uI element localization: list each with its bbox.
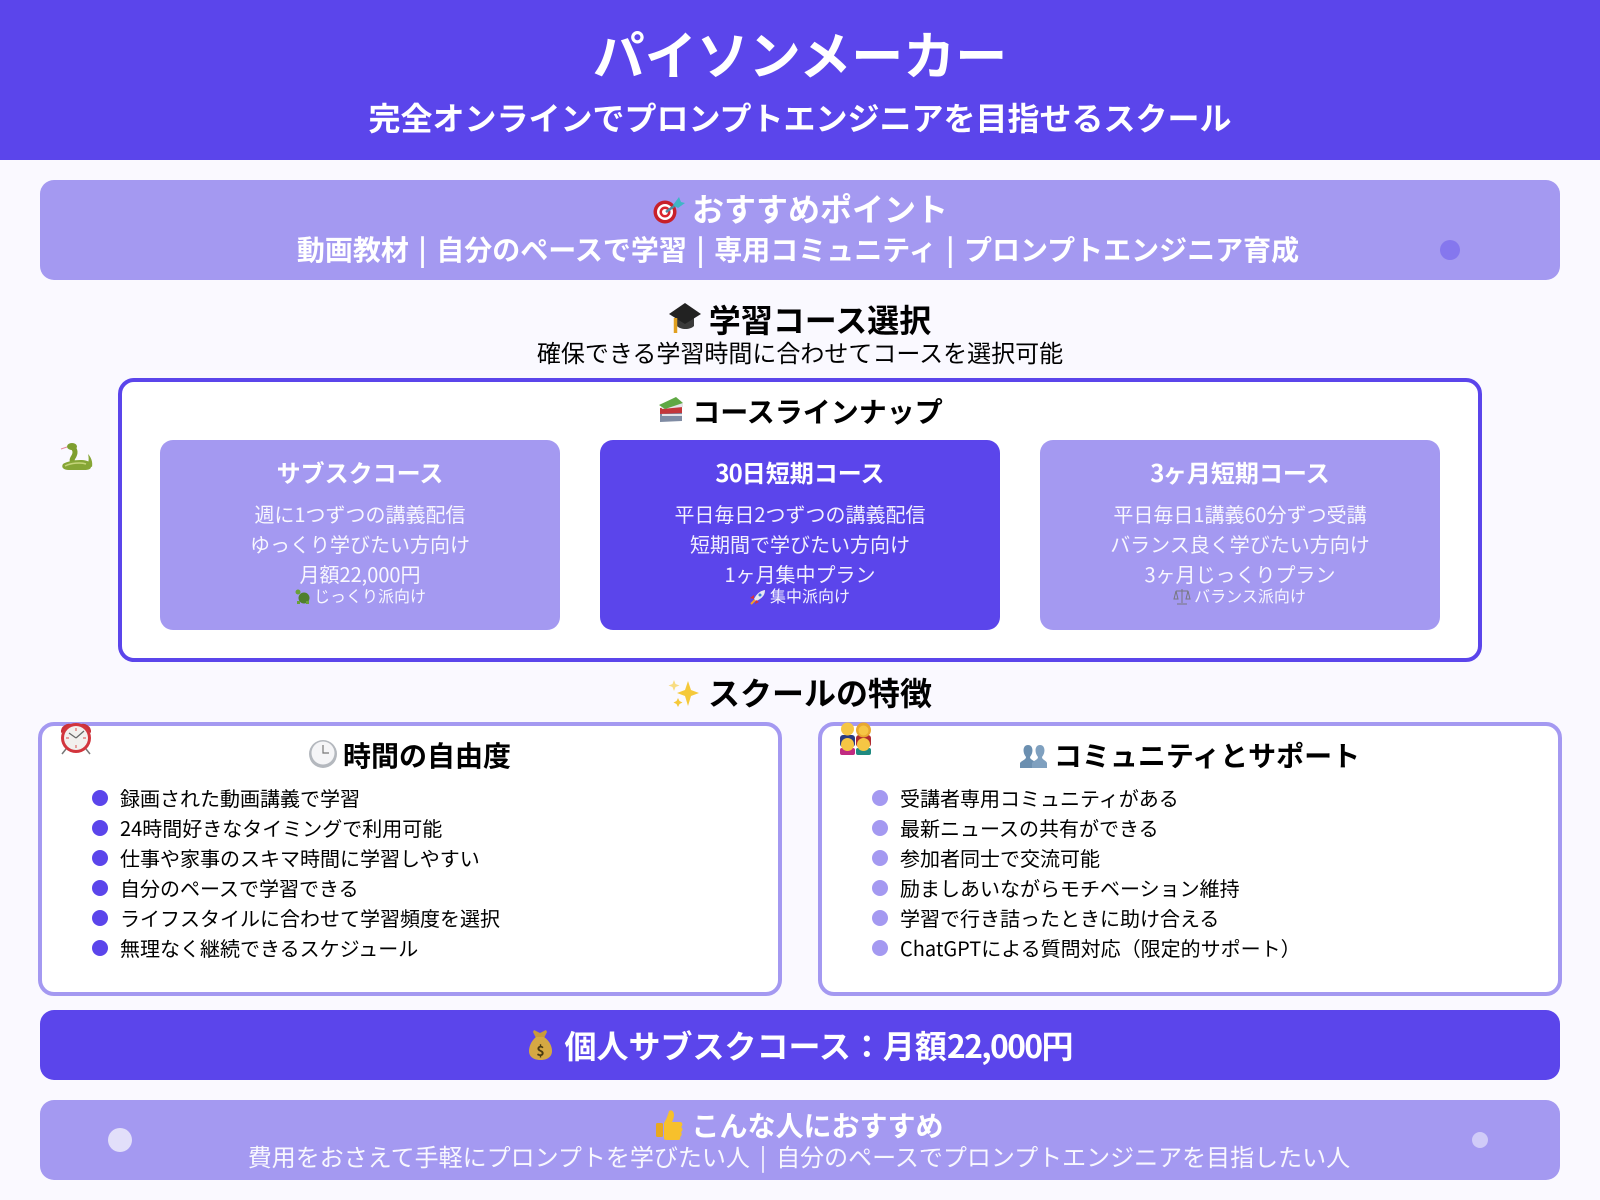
bullet list: 最新ニュースの共有ができる <box>900 813 1159 842</box>
icon: graduation cap <box>669 303 701 333</box>
card details: バランス良く学びたい方向け <box>1110 529 1370 558</box>
card: subscription course <box>160 440 560 630</box>
bullet list: 仕事や家事のスキマ時間に学習しやすい <box>120 843 480 872</box>
card details: 短期間で学びたい方向け <box>690 529 910 558</box>
card title: 3ヶ月短期コース <box>1150 454 1330 489</box>
card: 3-month course <box>1040 440 1440 630</box>
card details: 3ヶ月じっくりプラン <box>1144 559 1336 588</box>
icon: target <box>654 197 685 224</box>
icon: alarm clock <box>61 723 91 754</box>
header banner <box>0 0 1600 160</box>
card: 30-day course <box>600 440 1000 630</box>
section: school features <box>668 669 932 715</box>
heading: コースラインナップ <box>692 391 943 431</box>
audience tag: じっくり派向け <box>314 583 426 607</box>
icon: turtle <box>296 590 310 604</box>
icon: scales <box>1174 589 1190 604</box>
bullet list: ライフスタイルに合わせて学習頻度を選択 <box>120 903 500 932</box>
panel: recommended for <box>40 1100 1560 1180</box>
panel: course lineup <box>120 380 1480 660</box>
heading: おすすめポイント <box>692 185 948 231</box>
heading: 学習コース選択 <box>709 296 931 342</box>
heading: こんな人におすすめ <box>691 1105 944 1145</box>
card title: サブスクコース <box>277 454 443 489</box>
bullet list: 参加者同士で交流可能 <box>900 843 1100 872</box>
description: 費用をおさえて手軽にプロンプトを学びたい人 | 自分のペースでプロンプトエンジニアを目指したい人 <box>248 1138 1350 1173</box>
bullet list: 励ましあいながらモチベーション維持 <box>900 873 1240 902</box>
subtitle: 完全オンラインでプロンプトエンジニアを目指せるスクール <box>368 94 1232 140</box>
bullet list: 録画された動画講義で学習 <box>120 783 360 812</box>
card details: 月額22,000円 <box>299 559 421 588</box>
description: 確保できる学習時間に合わせてコースを選択可能 <box>537 334 1063 369</box>
icon: books <box>659 397 683 422</box>
bullet list: 受講者専用コミュニティがある <box>900 783 1179 812</box>
bullet list: 自分のペースで学習できる <box>120 873 359 902</box>
bullet list: 学習で行き詰ったときに助け合える <box>900 903 1219 932</box>
card details: ゆっくり学びたい方向け <box>250 529 470 558</box>
panel: time freedom <box>40 723 780 994</box>
decorative circle <box>1440 240 1460 260</box>
section: course selection <box>537 296 1063 369</box>
panel: community and support <box>820 722 1560 994</box>
title: パイソンメーカー <box>593 15 1007 90</box>
icon: rocket <box>750 590 765 604</box>
icon: family <box>840 722 871 755</box>
icon: busts <box>1020 745 1047 768</box>
heading: 時間の自由度 <box>343 735 511 775</box>
icon: money bag <box>529 1030 552 1061</box>
key points: 動画教材 | 自分のペースで学習 | 専用コミュニティ | プロンプトエンジニア育成 <box>297 229 1299 269</box>
bullet list <box>92 783 500 962</box>
bullet list: 無理なく継続できるスケジュール <box>120 933 418 962</box>
card details: 平日毎日1講義60分ずつ受講 <box>1113 499 1367 528</box>
price banner <box>40 1010 1560 1080</box>
audience tag: 集中派向け <box>770 583 850 607</box>
icon: snake <box>61 443 92 470</box>
card details: 1ヶ月集中プラン <box>724 559 876 588</box>
heading: コミュニティとサポート <box>1054 735 1360 775</box>
panel: recommended points <box>40 180 1560 280</box>
audience tag: バランス派向け <box>1194 583 1306 607</box>
heading: スクールの特徴 <box>708 669 932 715</box>
icon: sparkles <box>668 680 699 707</box>
bullet list <box>872 783 1301 962</box>
icon: money bag: $ <box>536 1041 545 1061</box>
icon: clock <box>309 740 337 768</box>
bullet list: 24時間好きなタイミングで利用可能 <box>120 813 442 842</box>
icon: thumbs up <box>656 1110 682 1140</box>
bullet list: ChatGPTによる質問対応（限定的サポート） <box>900 933 1301 962</box>
card title: 30日短期コース <box>715 454 885 489</box>
card details: 平日毎日2つずつの講義配信 <box>674 499 926 528</box>
card details: 週に1つずつの講義配信 <box>254 499 466 528</box>
price text: 個人サブスクコース：月額22,000円 <box>564 1022 1074 1068</box>
decorative circles <box>108 1128 1488 1152</box>
